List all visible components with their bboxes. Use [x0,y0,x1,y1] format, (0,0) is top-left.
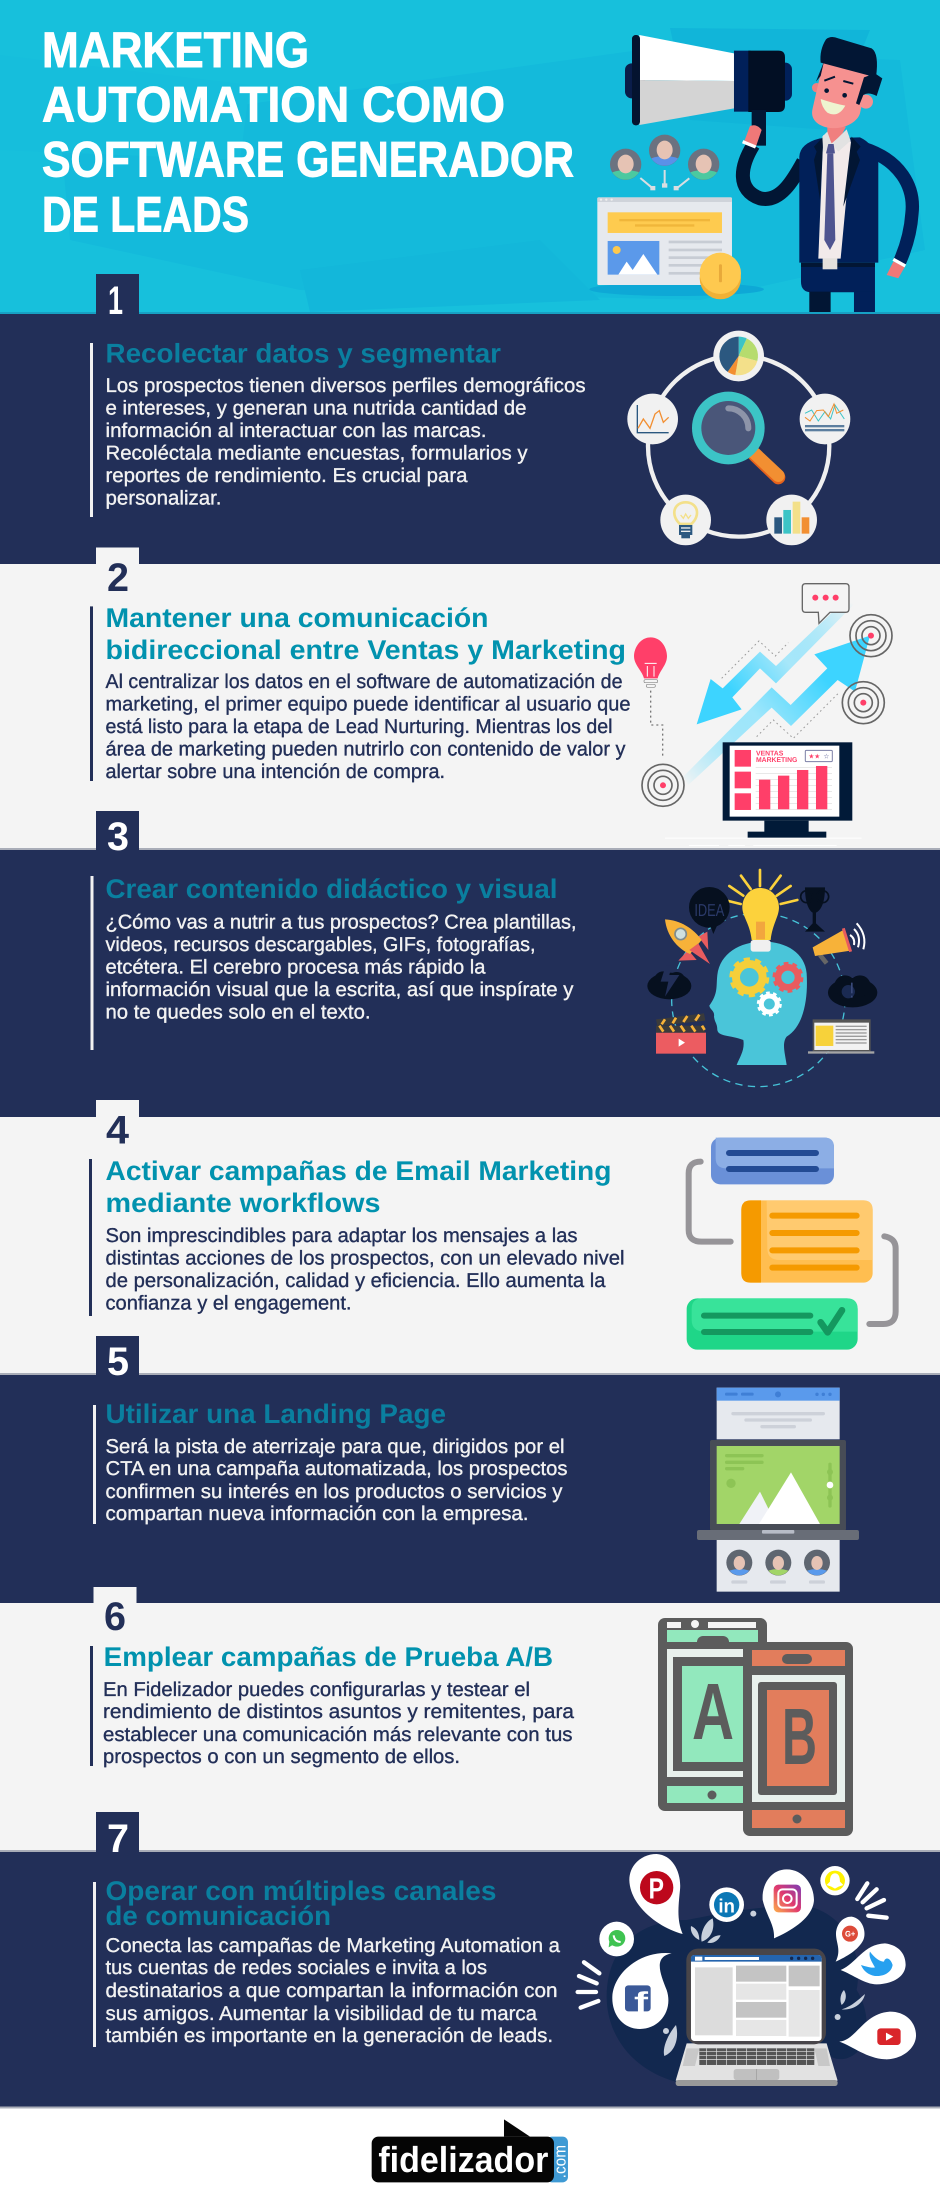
text block: no te quedes solo en el texto. [106,1002,370,1024]
text block: establecer una comunicación más relevante con tus [103,1724,572,1746]
illustration: businessman with megaphone and landing page [589,35,912,315]
icon: pinterest bubble [629,1854,683,1934]
heading: mediante workflows [106,1188,380,1218]
text block: rendimiento de distintos asuntos y remitentes, para [103,1701,575,1723]
title: DE LEADS [42,186,249,242]
text block [106,912,576,1024]
icon: target [642,764,684,806]
icon: target [842,682,884,724]
icon: rocket [665,919,710,964]
heading [106,603,626,665]
text block: Será la pista de aterrizaje para que, dirigidos por el [106,1436,564,1458]
text block: e intereses, y generan una nutrida cantidad de [106,398,526,420]
icon: sales monitor: ★★ [808,752,820,760]
heading: Activar campañas de Email Marketing [106,1156,612,1186]
icon: head with gears [709,942,807,1065]
icon: laptop [676,1949,838,2086]
icon: small megaphone [813,923,864,963]
icon: phone A [658,1618,767,1811]
text block: está listo para la etapa de Lead Nurturing. Mientras los del [106,716,612,738]
title [42,22,574,242]
text block: prospectos o con un segmento de ellos. [103,1746,460,1768]
text block: ¿Cómo vas a nutrir a tus prospectos? Crea plantillas, [106,912,576,934]
text block [106,375,586,510]
panel: step 3 [0,811,940,1117]
icon: whatsapp badge [599,1922,634,1956]
icon: instagram bubble [763,1869,814,1938]
icon: trend lines [800,394,850,444]
text block [106,671,630,783]
icon: laptop [808,1019,874,1054]
text block: área de marketing pueden nutrirlo con contenido de valor y [106,739,626,761]
text block: etcétera. El cerebro procesa más rápido la [106,957,486,979]
panel: step 4 [0,1100,940,1374]
icon: page footer with avatars [717,1540,840,1592]
icon: laptop screen [697,1440,859,1540]
text block: En Fidelizador puedes configurarlas y testear el [103,1679,530,1701]
text block [106,1436,568,1525]
icon: snapchat badge [820,1866,850,1895]
text block: destinatarios a que compartan la información con [106,1980,558,2002]
text block: alertar sobre una intención de compra. [106,761,445,783]
icon: businessman [743,37,912,315]
illustration: data ring with magnifier [627,331,850,545]
icon: speech bubble [802,584,849,623]
text block [103,1679,575,1768]
icon: idea bubble [689,887,730,934]
icon: light bulb [724,870,797,952]
logo: fidelizador.com [372,2119,569,2182]
icon: pie chart [713,331,764,381]
step number 1: 1 [108,279,123,323]
logo: fidelizador.com: fidelizador [378,2139,548,2180]
icon: idea bubble: IDEA [694,901,724,920]
text block [106,1225,624,1315]
heading: bidireccional entre Ventas y Marketing [106,635,626,665]
arrow: up [683,636,870,785]
icon: clapperboard video [656,1013,706,1054]
icon: sales monitor: ☆ [823,752,829,760]
text block: marketing, el primer equipo puede identificar al usuario que [106,694,630,716]
text block [106,1935,561,2047]
arrow: down [697,603,855,724]
heading: Emplear campañas de Prueba A/B [104,1642,553,1672]
icon: twitter bubble [841,1943,906,1984]
illustration: head with ideas [647,870,877,1087]
illustration: sales and marketing arrows [634,584,892,846]
text block: tus cuentas de redes sociales e invita a los [106,1957,487,1979]
text block: reportes de rendimiento. Es crucial para [106,465,468,487]
text block: información visual que la escrita, así que inspírate y [106,979,574,1001]
heading [106,1156,612,1218]
text block: Los prospectos tienen diversos perfiles demográficos [106,375,586,397]
panel: step 1 [0,274,940,564]
icon: trophy [801,887,829,932]
panel: step 5 [0,1336,940,1603]
icon: phone B [743,1642,853,1836]
icon: sales monitor: VENTAS [756,750,783,757]
step number 7: 7 [107,1817,129,1861]
icon: megaphone [625,35,792,146]
icon: page header [717,1388,840,1439]
icon: phone B: B [782,1692,817,1781]
panel: footer [0,2106,940,2206]
title: SOFTWARE GENERADOR [42,132,574,188]
panel: hero [0,0,940,315]
panel: step 6 [0,1587,940,1851]
text block: confirmen su interés en los productos o servicios y [106,1481,562,1503]
panel: step 7 [0,1812,940,2108]
heading: Recolectar datos y segmentar [106,338,501,368]
heading: Crear contenido didáctico y visual [106,874,558,904]
text block: CTA en una campaña automatizada, los prospectos [106,1458,568,1480]
text block: distintas acciones de los prospectos, con un elevado nivel [106,1248,624,1270]
icon: youtube bubble [839,2012,916,2059]
text block: Conecta las campañas de Marketing Automation a [106,1935,561,1957]
icon: bar chart [766,495,817,545]
icon: pink bulb [634,637,667,758]
text block: Recoléctala mediante encuestas, formularios y [106,443,528,465]
icon: facebook bubble [612,1953,672,2029]
step number 3: 3 [107,815,129,859]
icon: pinterest bubble: P [649,1872,664,1905]
icon: phone A: A [692,1667,734,1756]
heading: Utilizar una Landing Page [106,1399,446,1429]
icon: target [850,615,892,657]
icon: linkedin badge: in [718,1895,735,1917]
icon: web page window [597,197,732,285]
icon: sales monitor [665,742,862,846]
icon: linkedin badge [709,1887,744,1922]
heading: Mantener una comunicación [106,603,488,633]
icon: orange message card [741,1200,873,1283]
step number 5: 5 [107,1340,129,1384]
icon: green message card with check [687,1298,858,1350]
icon: magnifier [692,392,778,477]
icon: blue message card [711,1138,834,1184]
icon: facebook bubble: f [634,1986,649,2017]
icon: light bulb [660,495,711,545]
icon: google plus bubble: G+ [845,1930,855,1939]
text block: sus amigos. Aumentar la visibilidad de tu marca [106,2003,538,2025]
icon: line chart [627,394,678,444]
step number 6: 6 [104,1595,126,1639]
step number 4: 4 [106,1108,130,1152]
text block: Son imprescindibles para adaptar los mensajes a las [106,1225,578,1247]
icon: lead avatars [610,135,719,190]
text block: videos, recursos descargables, GIFs, fotografías, [106,934,536,956]
icon: gold coin [700,253,741,299]
illustration: laptop with social networks [578,1854,916,2086]
heading [106,1876,496,1931]
icon: sales monitor: MARKETING [756,756,797,764]
text block: confianza y el engagement. [106,1293,352,1315]
icon: alert cloud [828,975,877,1007]
illustration: email workflow [687,1138,896,1350]
icon: lightning cloud [647,966,691,999]
title: AUTOMATION COMO [42,76,505,132]
text block: personalizar. [106,488,222,510]
step number 2: 2 [107,556,129,600]
text block: información al interactuar con las marcas. [106,420,486,442]
heading: Operar con múltiples canales [106,1876,496,1906]
panel: step 2 [0,548,940,849]
icon: google plus bubble [836,1917,865,1962]
title: MARKETING [42,22,309,78]
illustration: A/B phones [658,1618,853,1836]
heading: de comunicación [106,1901,331,1931]
illustration: landing page on laptop [697,1388,859,1592]
text block: de personalización, calidad y eficiencia. Ello aumenta la [106,1270,606,1292]
text block: compartan nueva información con la empresa. [106,1503,528,1525]
text block: Al centralizar los datos en el software de automatización de [106,671,622,693]
text block: también es importante en la generación de leads. [106,2025,553,2047]
logo: fidelizador.com: .com [550,2145,569,2178]
